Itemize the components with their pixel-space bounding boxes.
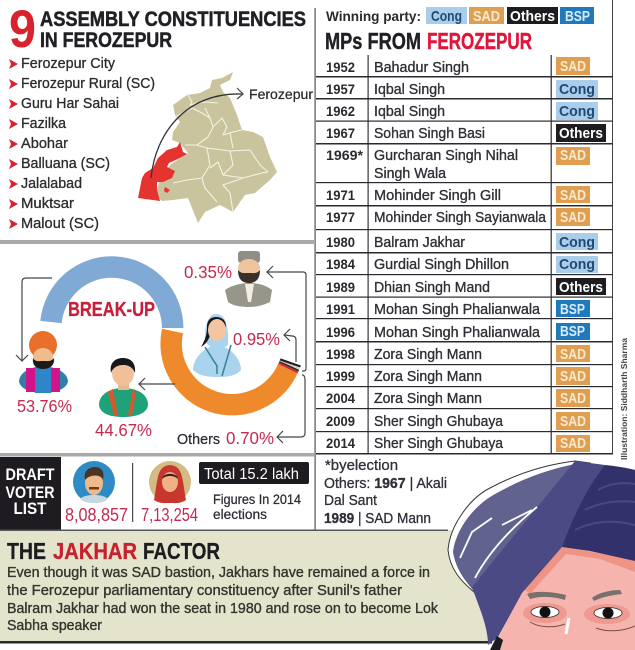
table row 1996: Mohan Singh Phalianwala — [374, 324, 541, 341]
table row 1957: Cong — [559, 81, 595, 98]
table row 1984: 1984 — [326, 256, 355, 272]
footnote: Dal Sant — [324, 493, 377, 509]
percentage 0.95%: 0.95% — [233, 329, 280, 349]
others stripes — [288, 362, 291, 369]
heading: MPs from Ferozepur — [325, 28, 532, 54]
table row 1989: Others — [559, 279, 603, 296]
table row 1969 — [326, 147, 590, 182]
female voter count: 7,13,254 — [141, 505, 198, 525]
table row 1962 — [326, 102, 598, 120]
table row 1957: 1957 — [326, 81, 355, 97]
list of constituencies: Ferozepur Rural (SC) — [21, 76, 155, 92]
figure: Hindu man 44.67% — [99, 358, 148, 417]
heading: the Jakhar factor: THE — [7, 538, 46, 564]
percentage 0.35%: 0.35% — [184, 262, 232, 282]
table row 1967: Others — [559, 125, 603, 142]
heading: assembly constituencies in Ferozepur: ASSEMBLY CONSTITUENCIES — [40, 8, 306, 31]
heading: MPs from Ferozepur: FEROZEPUR — [427, 28, 532, 54]
list of constituencies: Malout (SC) — [21, 216, 99, 232]
table row 1991: 1991 — [326, 301, 355, 317]
table row 1984: Gurdial Singh Dhillon — [374, 256, 509, 273]
figures note — [213, 492, 301, 522]
table row 1998: Zora Singh Mann — [374, 346, 482, 363]
heading: assembly constituencies in Ferozepur — [9, 0, 306, 59]
collar shadow — [490, 636, 503, 650]
table row 1999: 1999 — [326, 368, 355, 384]
figure: Sikh man 53.76% — [19, 331, 68, 393]
list of constituencies: Jalalabad — [21, 176, 82, 192]
table row 1989: 1989 — [326, 279, 355, 295]
black voter list label — [0, 457, 61, 530]
table row 1952: SAD — [560, 58, 586, 75]
table row 1971: 1971 — [326, 187, 355, 203]
footnote: *byelection — [325, 458, 398, 474]
table row 1969: Gurcharan Singh Nihal — [374, 147, 518, 164]
table row 1971: Mohinder Singh Gill — [374, 187, 501, 204]
illustration: Sunil Jakhar portrait — [448, 461, 635, 650]
table row 1996: 1996 — [326, 324, 355, 340]
table row 1980 — [326, 233, 598, 251]
map of Punjab with Ferozepur highlighted: Ferozepur — [249, 86, 313, 102]
table row 2009: 2009 — [326, 413, 355, 429]
table row 2004: SAD — [560, 390, 586, 407]
percentage 44.67%: 44.67% — [95, 420, 152, 440]
table row 2004: Zora Singh Mann — [374, 390, 482, 407]
legend: winning party: Cong — [431, 8, 462, 25]
panel: break-up chart — [16, 251, 306, 448]
male voter count: 8,08,857 — [65, 505, 128, 525]
table row 1991 — [326, 300, 590, 318]
table row 1957: Iqbal Singh — [374, 81, 445, 98]
table row 1977: SAD — [560, 209, 586, 226]
table row 2004: 2004 — [326, 390, 355, 406]
table row 1996 — [326, 323, 590, 341]
table row 1991: Mohan Singh Phalianwala — [374, 301, 541, 318]
heading: the Jakhar factor — [7, 538, 220, 564]
eyes and brows — [523, 590, 635, 634]
table row 1980: Balram Jakhar — [374, 234, 465, 251]
right turban wrap — [562, 465, 635, 561]
table row 1971 — [326, 186, 590, 204]
table row 2014: Sher Singh Ghubaya — [374, 435, 504, 452]
table row 1952: Bahadur Singh — [374, 59, 469, 76]
table row 1952: 1952 — [326, 59, 355, 75]
table grid — [316, 0, 613, 454]
others label: 0.70% — [226, 428, 274, 448]
list of constituencies — [9, 56, 155, 232]
body text — [7, 565, 439, 634]
table row 1980: Cong — [559, 234, 595, 251]
map of Punjab with Ferozepur highlighted — [138, 72, 313, 223]
percentage 53.76%: 53.76% — [17, 396, 72, 416]
table row 2004 — [326, 389, 590, 407]
vertical divider — [314, 8, 316, 530]
icon: male voter — [73, 461, 115, 503]
footnote — [324, 458, 447, 527]
figures note: elections — [213, 507, 267, 522]
table row 1998 — [326, 345, 590, 363]
table row 1998: 1998 — [326, 346, 355, 362]
panel: MPs table — [316, 0, 629, 527]
heading: the Jakhar factor: JAKHAR — [53, 538, 137, 564]
table row 1969: 1969* — [326, 147, 364, 163]
list of constituencies: Fazilka — [21, 116, 67, 132]
table row 2009: Sher Singh Ghubaya — [374, 413, 504, 430]
table row 2014 — [326, 435, 590, 452]
heading: assembly constituencies in Ferozepur: IN FEROZEPUR — [40, 29, 172, 52]
table row 1984 — [326, 256, 598, 273]
figures note: Figures In 2014 — [213, 492, 301, 507]
legend: winning party: SAD — [473, 8, 500, 25]
list of constituencies: Balluana (SC) — [21, 156, 110, 172]
table row 1962: 1962 — [326, 103, 355, 119]
table row 2009 — [326, 412, 590, 430]
orange arc — [171, 331, 288, 405]
table row 1952 — [326, 57, 590, 76]
table row 1967: Sohan Singh Basi — [374, 125, 485, 142]
body text: the Ferozepur parliamentary constituency after Sunil's father — [7, 583, 402, 599]
body text: Sabha speaker — [7, 618, 102, 634]
table row 2009: SAD — [560, 413, 586, 430]
table row 1998: SAD — [560, 346, 586, 363]
table row 1989 — [326, 278, 606, 296]
table row 2014: 2014 — [326, 435, 355, 451]
footnote: Others: 1967 | Akali — [324, 476, 447, 492]
table row 1969: SAD — [560, 147, 586, 164]
heading: the Jakhar factor: FACTOR — [143, 538, 220, 564]
others label — [177, 428, 274, 448]
table row 1962: Iqbal Singh — [374, 103, 445, 120]
table row 1971: SAD — [560, 187, 586, 204]
table row 2014: SAD — [560, 435, 586, 452]
panel: draft voter list — [0, 457, 309, 530]
table row 1999 — [326, 367, 590, 385]
break-up label: BREAK-UP — [68, 299, 155, 321]
connector arrows — [16, 266, 306, 443]
table row 1984: Cong — [559, 256, 595, 273]
legend: winning party: Winning party: — [326, 9, 421, 24]
panel: assembly constituencies — [9, 0, 313, 232]
turban band — [472, 461, 605, 645]
table row 1967 — [326, 124, 606, 142]
legend: winning party: BSP — [565, 8, 590, 25]
table row 1967: 1967 — [326, 125, 355, 141]
legend: winning party — [326, 7, 594, 25]
table row 1996: BSP — [560, 323, 585, 340]
heading: assembly constituencies in Ferozepur: 9 — [9, 0, 36, 59]
black voter list label: VOTER — [6, 483, 54, 502]
table row 1977: 1977 — [326, 209, 355, 225]
legend: winning party: Others — [510, 8, 555, 25]
illustration credit: Illustration: Siddharth Sharma — [620, 337, 629, 460]
face — [490, 546, 635, 650]
list of constituencies: Ferozepur City — [21, 56, 116, 72]
table row 1989: Dhian Singh Mand — [374, 279, 490, 296]
table row 1991: BSP — [560, 301, 585, 318]
figure: elderly man 0.35% — [225, 251, 272, 307]
figure: woman 0.95% — [193, 314, 241, 377]
total label: Total 15.2 lakh — [204, 466, 299, 483]
list of constituencies: Abohar — [21, 136, 68, 152]
list of constituencies: Guru Har Sahai — [21, 96, 119, 112]
panel: the Jakhar factor — [0, 530, 510, 644]
heading: MPs from Ferozepur: MPs FROM — [325, 28, 421, 54]
table row 1980: 1980 — [326, 234, 355, 250]
icon: female voter — [149, 461, 191, 503]
left turban fold — [448, 461, 590, 592]
table row 1977: Mohinder Singh Sayianwala — [374, 209, 547, 226]
body text: Balram Jakhar had won the seat in 1980 and rose on to become Lok — [7, 601, 439, 617]
list of constituencies: Muktsar — [21, 196, 74, 212]
others label: Others — [177, 432, 220, 448]
table row 1957 — [326, 80, 598, 98]
table row 1962: Cong — [559, 103, 595, 120]
divider — [132, 463, 133, 522]
black voter list label: DRAFT — [6, 465, 55, 484]
table row 1977 — [326, 208, 590, 226]
table row 1999: SAD — [560, 368, 586, 385]
footnote: 1989 | SAD Mann — [324, 511, 431, 527]
table row 1969: Singh Wala — [374, 165, 447, 182]
body text: Even though it was SAD bastion, Jakhars have remained a force in — [7, 565, 430, 581]
table row 1999: Zora Singh Mann — [374, 368, 482, 385]
black voter list label: LIST — [14, 499, 47, 518]
blue arc — [51, 267, 173, 328]
